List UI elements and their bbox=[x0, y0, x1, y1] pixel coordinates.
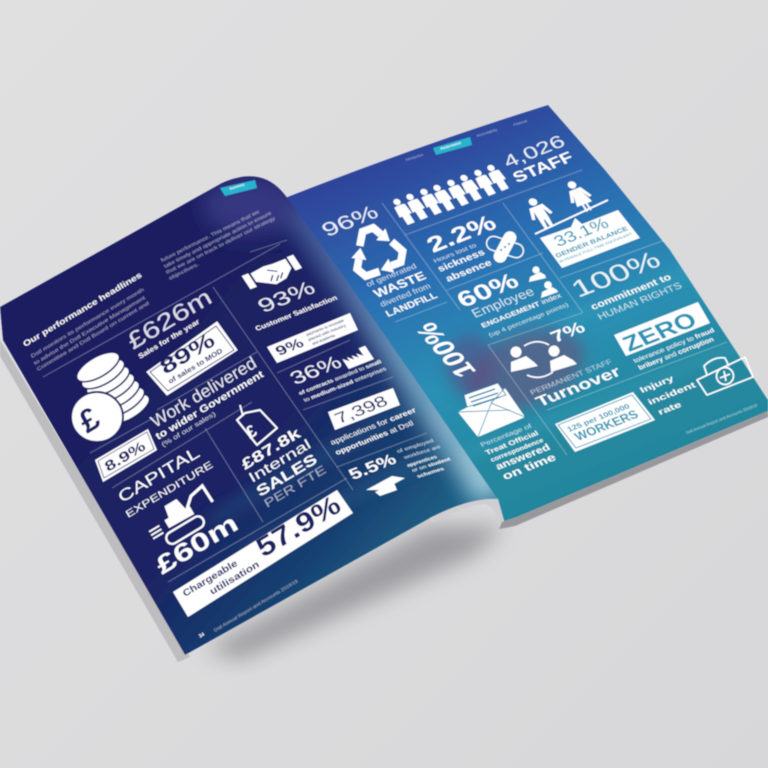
callout: chargeable utilisation: 57.9% bbox=[251, 489, 346, 563]
stat: treat official correspondence: Percentage of bbox=[479, 423, 534, 449]
stat: apprentices: schemes bbox=[416, 466, 446, 480]
callout: gender balance: 33.1% bbox=[551, 216, 612, 250]
stat: injury incident rate: rate bbox=[656, 399, 684, 417]
stat: apprentices: workforce are bbox=[403, 444, 442, 461]
icon: graduation cap bbox=[366, 476, 405, 496]
left page background bbox=[0, 175, 498, 655]
callout: gender balance: IN FEMALE FULL-TIME EQUIVALENT bbox=[558, 231, 634, 264]
stat: waste diverted: of generated bbox=[364, 262, 418, 289]
icon: price tag bbox=[237, 405, 277, 445]
stat: staff count: STAFF bbox=[510, 149, 577, 186]
navigation tabs: Financial bbox=[513, 119, 528, 127]
callout: chargeable utilisation bbox=[173, 489, 353, 617]
stat: apprentices: of employed bbox=[396, 438, 436, 455]
icon: price tag: £ bbox=[243, 421, 261, 442]
icon: row of staff bbox=[389, 163, 511, 226]
callout: zero tolerance bbox=[614, 302, 716, 372]
navigation tabs bbox=[405, 119, 528, 162]
icon: medical kit bbox=[697, 357, 753, 395]
panel: right page people stats bbox=[318, 119, 759, 482]
callout: 9 percent: placed with industry bbox=[307, 323, 347, 342]
stat: internal sales per FTE: Internal bbox=[246, 436, 313, 486]
navigation tabs: Introduction bbox=[405, 153, 424, 162]
intro text bbox=[30, 209, 277, 373]
stat: work delivered bbox=[148, 353, 266, 449]
callout: zero tolerance: ZERO bbox=[617, 307, 702, 356]
dividers bbox=[43, 240, 427, 582]
stat: sickness absence bbox=[421, 210, 501, 284]
stat: customer satisfaction: 93% bbox=[254, 277, 320, 317]
stat: staff count bbox=[499, 132, 577, 186]
stat: internal sales per FTE: £87.8k bbox=[239, 424, 304, 473]
stat: apprentices: apprentices bbox=[406, 454, 439, 469]
stat: capital expenditure: EXPENDITURE bbox=[124, 459, 216, 521]
stat: apprentices: 5.5% bbox=[346, 452, 400, 483]
callout: applications: applications for career bbox=[328, 406, 418, 447]
callout: applications: opportunities at Dstl bbox=[333, 419, 416, 457]
stat: internal sales per FTE bbox=[239, 424, 328, 511]
stat: contracts to SMEs: to medium-sized enterprises bbox=[303, 366, 388, 404]
stat: treat official correspondence: correspondence bbox=[489, 437, 546, 464]
stat: work delivered: (% of our sales) bbox=[161, 411, 217, 449]
stat: vertical 100 percent: 100% bbox=[409, 319, 483, 381]
callout: applications bbox=[328, 388, 418, 457]
stat: waste diverted: 96% bbox=[318, 202, 383, 241]
stat: contracts to SMEs bbox=[286, 353, 388, 404]
stat: sales for the year: Sales for the year bbox=[138, 318, 201, 361]
callout: workers: WORKERS bbox=[572, 408, 641, 443]
footer left: 34 bbox=[198, 632, 206, 640]
callout: 8.9 percent bbox=[95, 429, 157, 482]
stat: staff count: 4,026 bbox=[499, 132, 569, 171]
navigation tabs: Accountability bbox=[476, 128, 498, 138]
intro text: objectives. bbox=[168, 262, 200, 282]
stat: contracts to SMEs: of contracts awarded to small bbox=[298, 359, 383, 397]
right page bottom edge bbox=[499, 411, 768, 529]
tab: summary: Summary bbox=[229, 182, 245, 191]
stat: internal sales per FTE: PER FTE bbox=[262, 462, 328, 511]
intro text: to advise the Dstl Executive Management bbox=[33, 295, 147, 367]
intro text: future performance. This means that we bbox=[160, 209, 261, 264]
callout: 89 percent: 89% bbox=[156, 328, 219, 379]
callout: 89 percent: of sales to MOD bbox=[168, 348, 224, 386]
callout: chargeable utilisation: utilisation bbox=[208, 559, 262, 598]
intro text: that we are on track to deliver our strategy bbox=[165, 215, 277, 276]
stat: employee engagement bbox=[451, 268, 570, 339]
shadow under brochure bbox=[205, 526, 505, 660]
intro text: Dstl monitors its performance every month bbox=[30, 287, 146, 360]
callout: 9 percent: payments to innovate bbox=[305, 318, 346, 337]
stat: staff turnover: 7% bbox=[547, 318, 589, 346]
icon: employees bbox=[529, 266, 558, 298]
stat: contracts to SMEs: 36% bbox=[286, 353, 346, 389]
stat: capital expenditure: CAPITAL bbox=[115, 443, 203, 506]
stat: human rights: HUMAN RIGHTS bbox=[596, 281, 684, 322]
stat: customer satisfaction: Customer Satisfaction bbox=[254, 295, 339, 333]
stat: staff turnover bbox=[528, 318, 624, 410]
stat: apprentices bbox=[346, 438, 453, 483]
stat: staff turnover: PERMANENT STAFF bbox=[528, 357, 614, 397]
callout: 9 percent bbox=[267, 313, 358, 363]
stat: internal sales per FTE: SALES bbox=[254, 451, 320, 500]
stat: treat official correspondence: on time bbox=[500, 452, 559, 482]
right page background bbox=[285, 105, 768, 530]
tab: summary bbox=[220, 180, 257, 196]
stat: apprentices: or on student bbox=[411, 457, 453, 474]
stat: employee engagement: ENGAGEMENT index bbox=[480, 292, 564, 330]
stat: capital expenditure bbox=[115, 443, 243, 580]
callout: workers: 125 per 100,000 bbox=[565, 402, 631, 434]
stat: sales for the year: £626m bbox=[123, 283, 216, 354]
callout: workers bbox=[555, 392, 655, 452]
icon: plaster bbox=[485, 229, 525, 265]
stat: work delivered: Work delivered bbox=[148, 353, 260, 431]
stat: human rights: commitment to bbox=[589, 272, 674, 312]
navigation tabs: Performance bbox=[440, 141, 462, 151]
stat: treat official correspondence: answered bbox=[494, 442, 553, 472]
callout: 9 percent: and academia bbox=[311, 333, 337, 346]
stat: customer satisfaction bbox=[254, 277, 339, 333]
callout: zero tolerance: bribery and corruption bbox=[637, 336, 716, 372]
icon: envelope bbox=[458, 383, 525, 437]
brochure spread bbox=[0, 105, 768, 662]
icon: excavator bbox=[142, 484, 221, 552]
callout: applications: 7,398 bbox=[332, 393, 392, 427]
dividers bbox=[382, 170, 727, 455]
stat: employee engagement: (up 4 percentage points) bbox=[488, 302, 570, 339]
stat: treat official correspondence bbox=[479, 423, 559, 482]
stat: human rights: 100% bbox=[566, 246, 666, 303]
stat: sickness absence: sickness bbox=[436, 247, 487, 274]
stat: sickness absence: absence bbox=[444, 258, 494, 284]
stat: sales for the year bbox=[123, 283, 216, 361]
footer left bbox=[198, 578, 299, 640]
stat: human rights bbox=[566, 246, 684, 322]
intro text: Committee and Dstl Board on current and bbox=[36, 300, 151, 373]
stat: waste diverted: WASTE bbox=[371, 269, 429, 300]
stat: employee engagement: 60% bbox=[451, 268, 523, 312]
icon: staff turnover bbox=[510, 342, 577, 377]
icon: coins bbox=[71, 346, 154, 442]
stat: capital expenditure: £60m bbox=[151, 509, 243, 580]
stat: injury incident rate: incident bbox=[646, 380, 698, 407]
footer right: Dstl Annual Report and Accounts 2018/19 bbox=[685, 402, 759, 435]
icon: recycle bbox=[340, 220, 413, 288]
icon: handshake bbox=[241, 255, 305, 293]
icon: factory bbox=[340, 346, 374, 369]
intro text: take timely and appropriate action to ensure bbox=[163, 210, 273, 270]
stat: injury incident rate: Injury bbox=[638, 373, 676, 395]
stat: injury incident rate bbox=[638, 373, 698, 417]
page curl at spine bbox=[430, 499, 505, 529]
stat: sickness absence: Hours lost to bbox=[433, 243, 479, 265]
stat: treat official correspondence: Treat Official bbox=[484, 430, 540, 457]
footer left: Dstl Annual Report and Accounts 2018/19 bbox=[213, 578, 299, 633]
stat: staff turnover: Turnover bbox=[533, 364, 624, 410]
callout: zero tolerance: tolerance policy to fraud bbox=[632, 327, 716, 365]
callout: 8.9 percent: 8.9% bbox=[102, 437, 149, 475]
icon: gender balance bbox=[521, 178, 608, 234]
heading: Our performance headlines bbox=[22, 270, 144, 349]
callout: chargeable utilisation: Chargeable bbox=[181, 558, 240, 600]
page stack edge bbox=[0, 340, 190, 662]
panel: left page headlines bbox=[22, 180, 453, 640]
callout: gender balance: GENDER BALANCE bbox=[554, 225, 631, 260]
callout: 9 percent: 9% bbox=[272, 335, 307, 358]
stat: waste diverted bbox=[318, 202, 440, 319]
stat: work delivered: to wider Government bbox=[154, 369, 266, 443]
stat: waste diverted: diverted from bbox=[378, 282, 433, 309]
stat: sickness absence: 2.2% bbox=[421, 210, 501, 257]
stat: waste diverted: LANDFILL bbox=[384, 290, 440, 319]
callout: 89 percent bbox=[147, 322, 237, 395]
stat: employee engagement: Employee bbox=[468, 284, 537, 320]
icon: coins: £ bbox=[73, 400, 106, 440]
callout: gender balance bbox=[540, 210, 640, 268]
